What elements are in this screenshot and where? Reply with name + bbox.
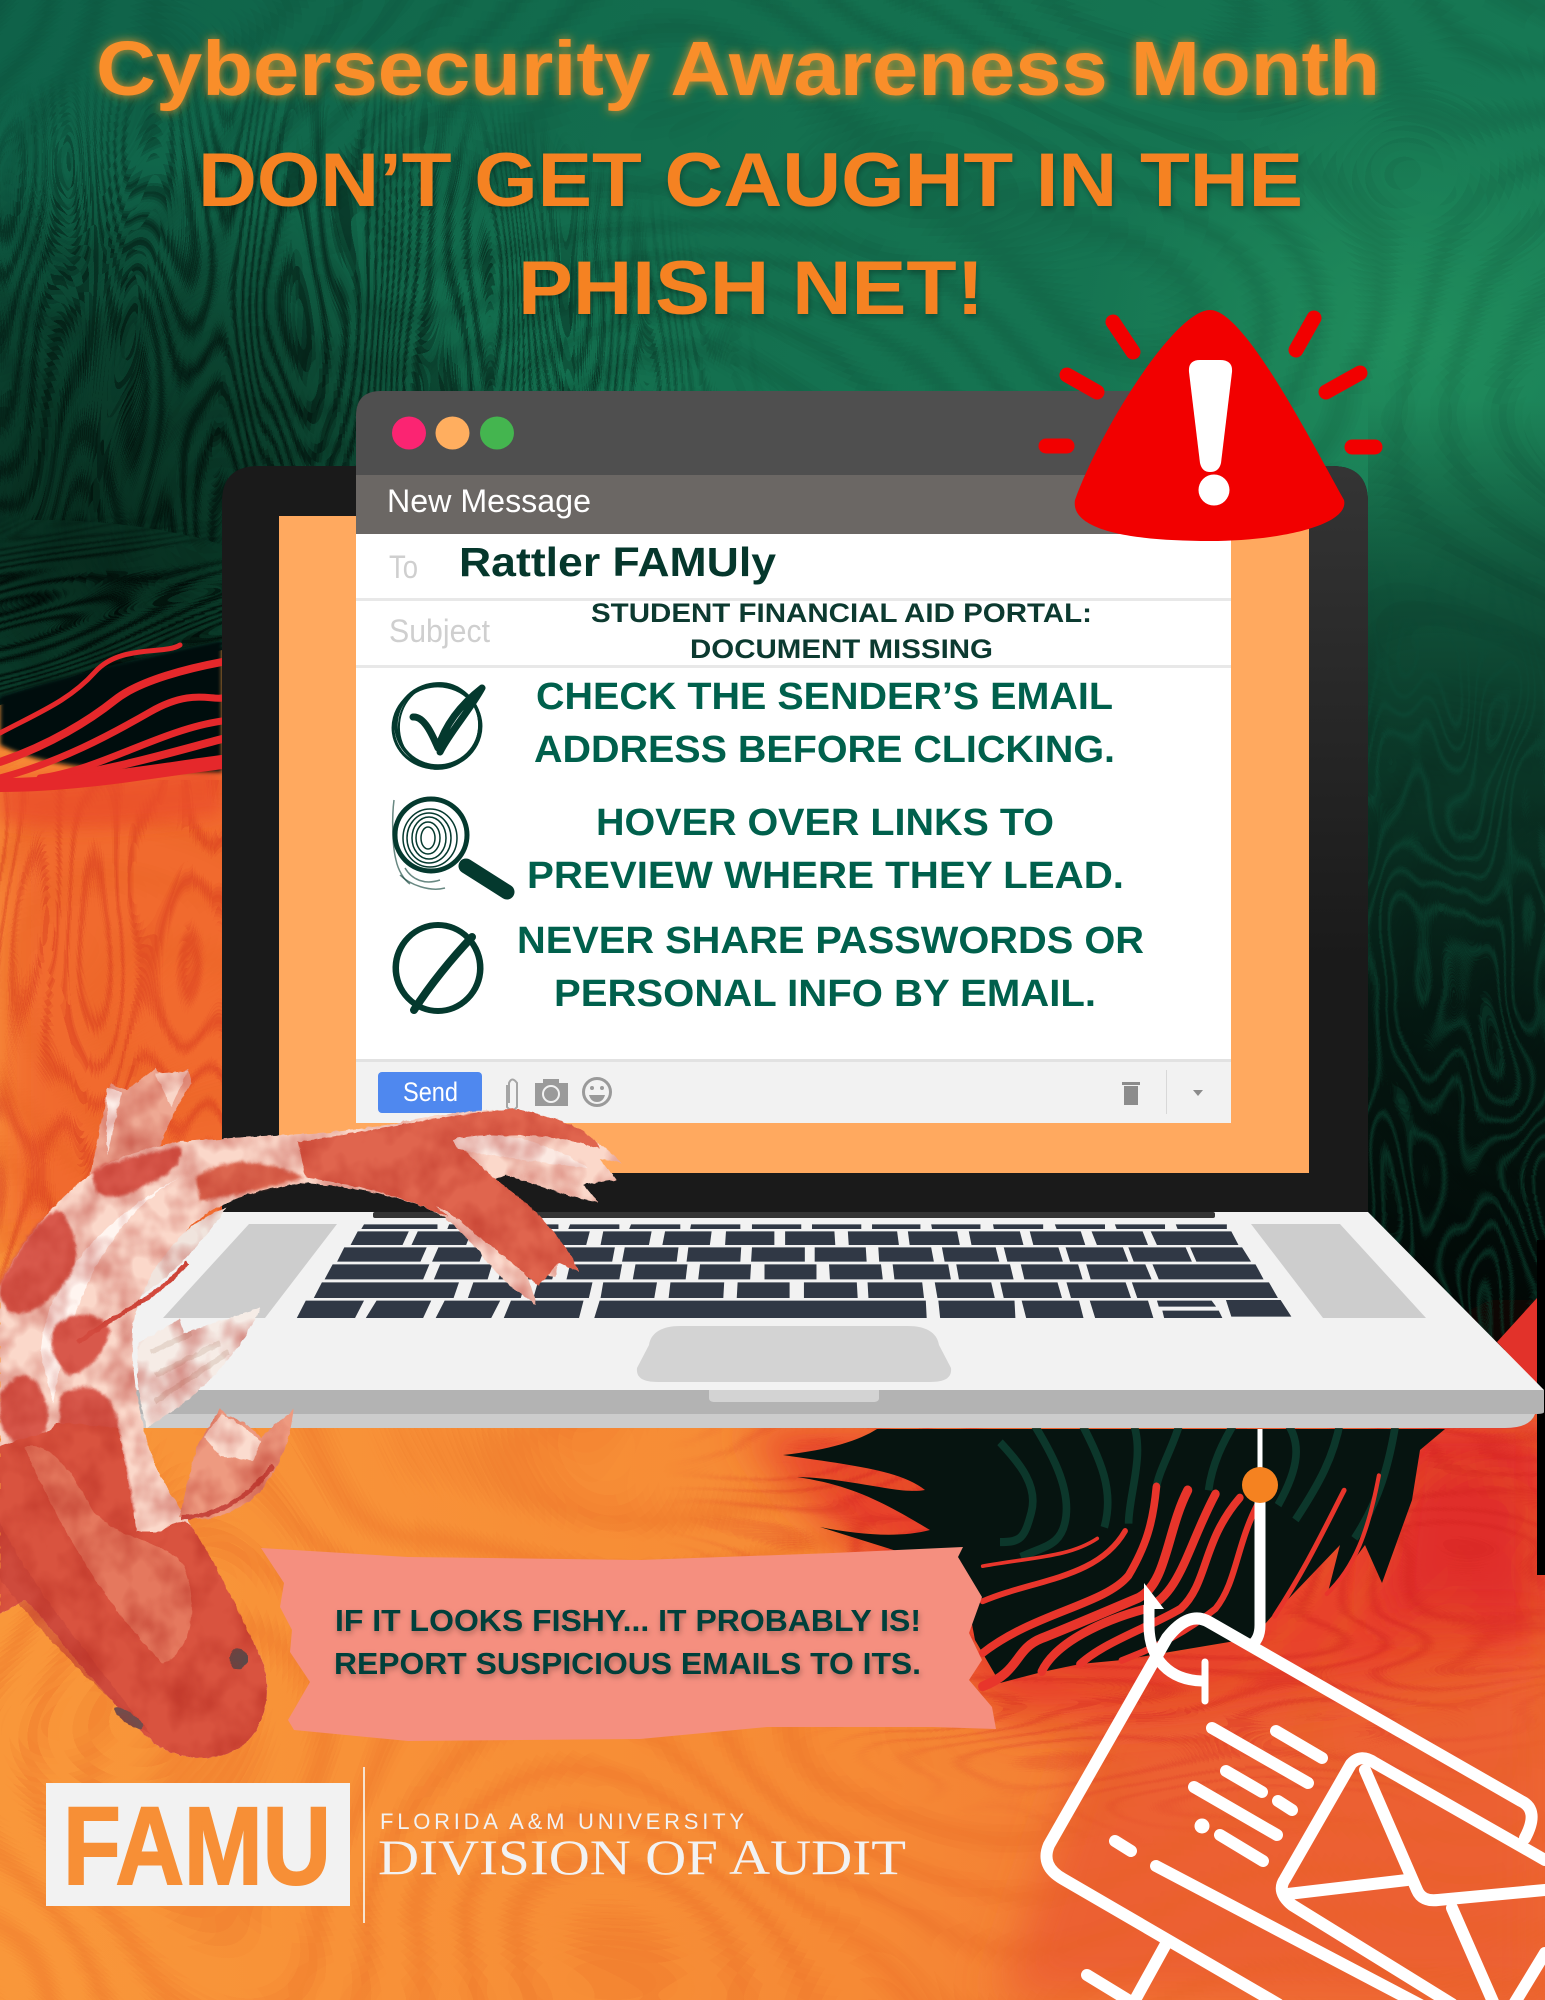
fish tail — [298, 1109, 600, 1298]
logo: FAMU Division of Audit: FLORIDA A&M UNIVERSITY — [380, 1809, 744, 1834]
tip: never share passwords: PERSONAL INFO BY EMAIL. — [554, 973, 1096, 1015]
fish body — [0, 1110, 622, 1758]
tip: never share passwords — [517, 920, 1144, 1015]
illustration: watercolor koi fish — [0, 1069, 622, 1758]
fish head — [0, 1423, 267, 1758]
fish red markings — [0, 1147, 304, 1517]
fish dorsal fin — [90, 1069, 192, 1175]
tip: check the sender's email: CHECK THE SENDER’S EMAIL — [536, 676, 1113, 718]
laptop lid and screen — [222, 466, 1368, 1226]
tip: hover over links — [527, 802, 1124, 897]
icon: prohibition sign — [386, 916, 490, 1020]
to field: To — [389, 549, 418, 585]
keyboard keys — [297, 1224, 1291, 1318]
subject field: Subject — [389, 613, 490, 649]
icon: check mark in circle — [388, 677, 486, 775]
logo: FAMU Division of Audit — [46, 1767, 906, 1923]
fish pectoral fin line — [78, 1262, 188, 1343]
subject field: STUDENT FINANCIAL AID PORTAL: — [591, 598, 1092, 628]
icon: fishing hook with line and bead — [1144, 1429, 1278, 1701]
icon: magnifier over fingerprint — [393, 799, 507, 892]
laptop keyboard base — [46, 1212, 1544, 1428]
speaker pads — [163, 1224, 1426, 1318]
to field — [356, 539, 1231, 601]
heading: don't get caught in the phish net: PHISH NET! — [518, 246, 984, 331]
tip: hover over links: HOVER OVER LINKS TO — [596, 802, 1054, 844]
send button — [378, 1072, 482, 1113]
heading: don't get caught in the phish net: DON’T GET CAUGHT IN THE — [198, 138, 1303, 223]
fish faint fins — [135, 1208, 261, 1428]
toolbar icons — [507, 1078, 1203, 1110]
panel: email compose window — [356, 391, 1231, 1123]
to field: Rattler FAMUly — [459, 539, 776, 585]
subject field: DOCUMENT MISSING — [690, 634, 993, 664]
compose toolbar — [356, 1059, 1231, 1123]
icon: red warning triangle with rays — [1046, 310, 1375, 541]
tip: never share passwords: NEVER SHARE PASSWORDS OR — [517, 920, 1144, 962]
callout banner: report suspicious emails: REPORT SUSPICIOUS EMAILS TO ITS. — [334, 1646, 921, 1681]
title: Cybersecurity Awareness Month: Cybersecurity Awareness Month — [96, 26, 1380, 112]
icon: email document and envelope outline — [1046, 1618, 1545, 2000]
logo: FAMU Division of Audit: DIVISION OF AUDIT — [378, 1829, 906, 1885]
dark swirl below the laptop — [783, 1420, 1445, 1686]
tip: check the sender's email — [534, 676, 1115, 771]
tip: check the sender's email: ADDRESS BEFORE CLICKING. — [534, 729, 1115, 771]
fish stripe highlight — [41, 1177, 180, 1404]
window control dots — [392, 416, 514, 450]
send button: Send — [403, 1077, 458, 1107]
heading: don't get caught in the phish net — [198, 138, 1303, 331]
logo: FAMU Division of Audit: FAMU — [63, 1785, 331, 1908]
subject field — [356, 598, 1231, 668]
fish lower fin — [180, 1409, 294, 1519]
tip: hover over links: PREVIEW WHERE THEY LEAD. — [527, 855, 1124, 897]
callout banner: report suspicious emails — [261, 1547, 996, 1741]
callout banner: report suspicious emails: IF IT LOOKS FISHY... IT PROBABLY IS! — [335, 1603, 921, 1638]
new message label: New Message — [387, 483, 591, 519]
trackpad — [637, 1326, 951, 1382]
